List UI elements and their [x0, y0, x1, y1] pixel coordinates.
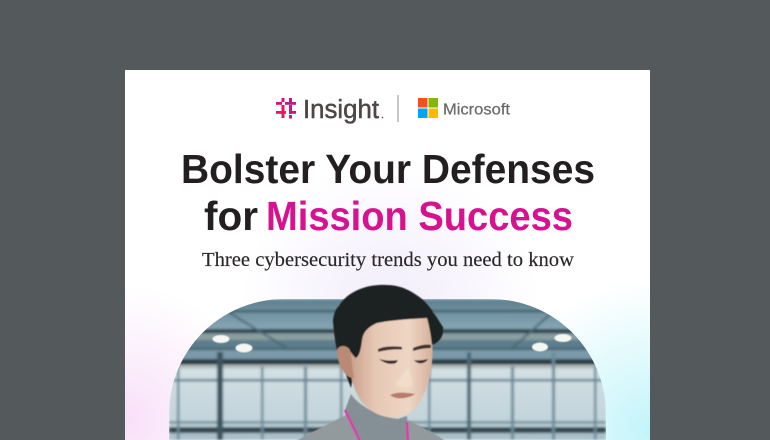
- icon: Microsoft squares: [418, 98, 438, 118]
- wordmark: Insight: Insight: [303, 96, 379, 124]
- logo divider: [398, 95, 399, 122]
- icon: Insight mark: [276, 98, 296, 118]
- turtleneck: [345, 394, 408, 440]
- logo: Insight: [276, 96, 383, 124]
- ear: [337, 346, 354, 378]
- lanyard: [345, 410, 360, 440]
- ceiling lights: [212, 334, 572, 352]
- subtitle: Three cybersecurity trends you need to know: [202, 250, 574, 271]
- nose highlight: [396, 368, 413, 387]
- title: Bolster Your Defenses: [181, 146, 595, 192]
- eyebrows: [378, 345, 431, 352]
- title: for: [204, 193, 258, 239]
- logo: Microsoft: [418, 98, 511, 118]
- wordmark: Microsoft: Microsoft: [443, 102, 511, 118]
- eyes: [379, 359, 428, 364]
- white card panel: [125, 70, 650, 440]
- mouth: [390, 393, 415, 398]
- hair: [333, 285, 443, 358]
- person: [296, 285, 445, 440]
- face: [350, 312, 434, 418]
- title: [181, 146, 595, 239]
- sweater: [296, 415, 445, 440]
- title: Mission Success: [266, 193, 573, 239]
- neck hair strip: [345, 372, 353, 388]
- photo background: warehouse interior: [169, 299, 606, 440]
- photo: man in warehouse: [169, 285, 606, 440]
